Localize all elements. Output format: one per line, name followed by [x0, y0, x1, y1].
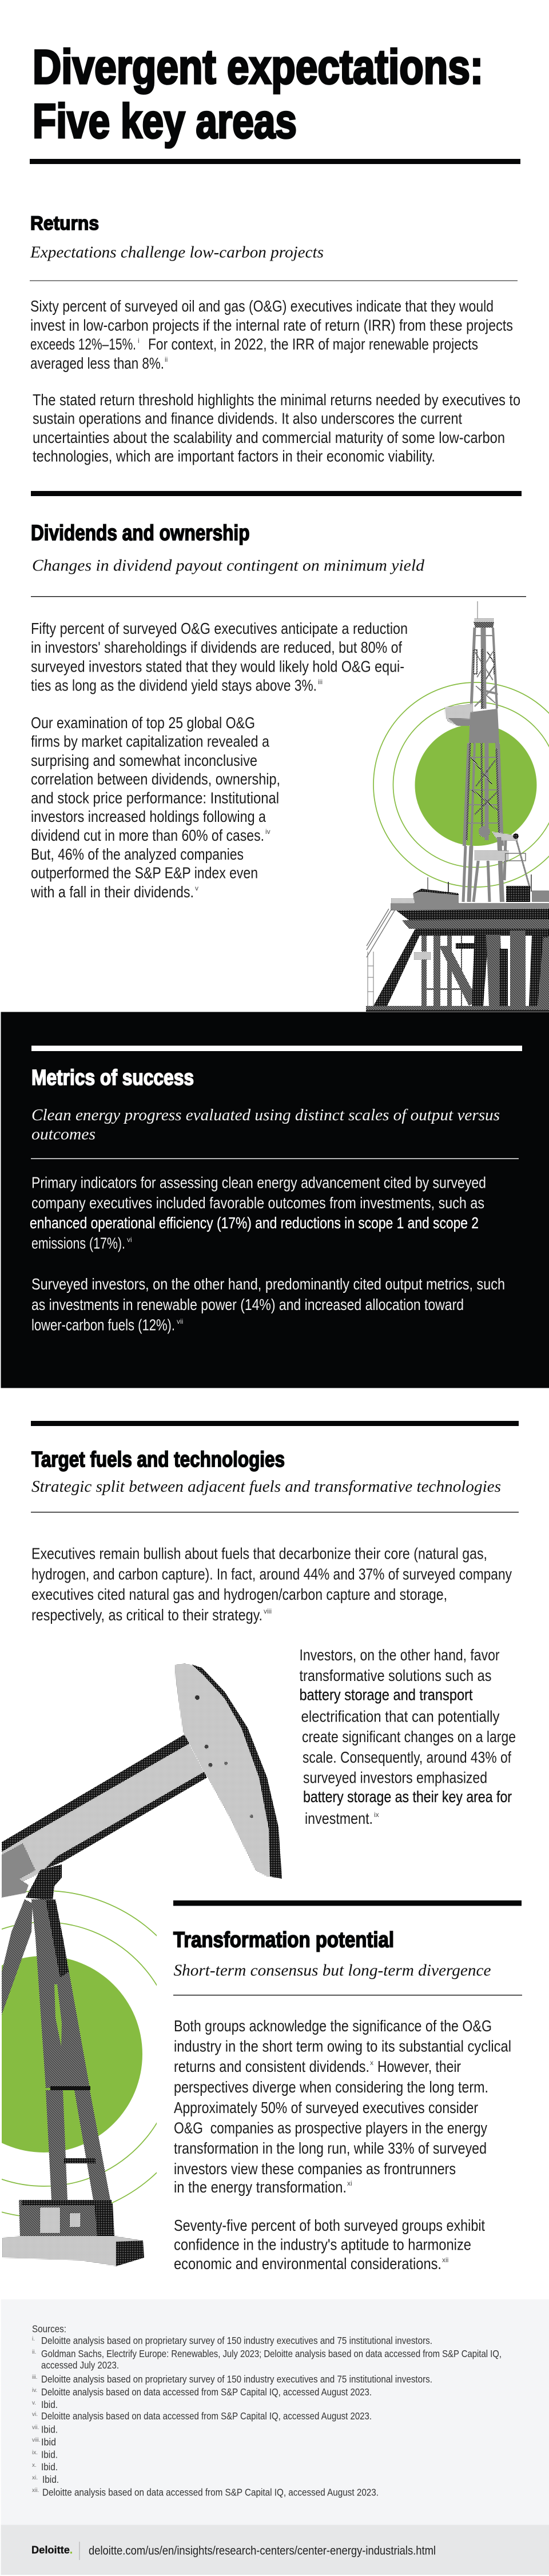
text: dividends paragraph 2: correlation between dividends, ownership, — [31, 770, 280, 788]
sources list: viii. — [32, 2437, 40, 2443]
panel: sources — [1, 2299, 549, 2525]
sources list: vii. — [32, 2425, 39, 2431]
subheading: target fuels: Strategic split between adjacent fuels and transformative technologies — [31, 1477, 501, 1496]
sources list: Ibid. — [41, 2461, 58, 2473]
heading: returns: Returns — [30, 213, 99, 234]
text: dividends paragraph 2: and stock price performance: Institutional — [31, 789, 279, 807]
subheading: metrics: outcomes — [31, 1125, 96, 1143]
sources list: Ibid. — [41, 2399, 58, 2410]
text: investors column: battery storage and transport — [300, 1686, 473, 1703]
text: transformation paragraph 2: xii — [442, 2256, 448, 2264]
green circle — [415, 724, 536, 846]
text: transformation paragraph 1: investors view these companies as frontrunners — [174, 2160, 456, 2178]
travelling block and crossbeam — [479, 826, 490, 837]
text: dividends paragraph 2: dividend cut in more than 60% of cases. — [31, 826, 264, 844]
stairs and scaffold — [367, 909, 395, 1006]
section: target fuels and technologies — [31, 1448, 519, 1827]
sources list: xii. — [32, 2487, 39, 2494]
text: target fuels paragraph — [31, 1544, 512, 1624]
sources list: Deloitte analysis based on proprietary survey of 150 industry executives and 75 institutional investors. — [41, 2373, 432, 2385]
sources list: Ibid — [41, 2436, 56, 2447]
subheading: transformation potential: Short-term consensus but long-term divergence — [174, 1962, 491, 1980]
title — [33, 40, 483, 148]
text: transformation paragraph 1: xi — [347, 2179, 352, 2187]
text: dividends paragraph 1: ties as long as the dividend yield stays above 3%. — [31, 677, 317, 694]
lower mast — [464, 743, 502, 846]
text: transformation paragraph 2 — [174, 2216, 485, 2273]
subheading: metrics: Clean energy progress evaluated using distinct scales of output versus — [31, 1106, 500, 1124]
text: metrics paragraph 2: as investments in renewable power (14%) and increased allocation toward — [31, 1296, 464, 1313]
section: dividends and ownership — [30, 521, 526, 901]
text: metrics paragraph 1 — [30, 1174, 486, 1252]
green rings and circle — [2, 1891, 157, 2216]
text: dividends paragraph 1: Fifty percent of surveyed O&G executives anticipate a reduction — [31, 620, 408, 637]
sources list: Deloitte analysis based on data accessed from S&P Capital IQ, accessed August 2023. — [42, 2486, 379, 2498]
text: investors column: ix — [374, 1811, 379, 1819]
side platform — [445, 704, 473, 726]
text: dividends paragraph 2: outperformed the S&P E&P index even — [31, 864, 258, 881]
text: investors column: battery storage as their key area for — [303, 1788, 512, 1806]
sources list: i. — [32, 2336, 35, 2342]
text: dividends paragraph 1: surveyed investors stated that they would likely hold O&G equi- — [31, 657, 404, 676]
sources list — [32, 2335, 502, 2498]
deck and truss — [391, 903, 549, 930]
illustration: oil rig with green circle — [366, 601, 549, 1012]
sources list: Ibid. — [42, 2474, 59, 2485]
subheading: metrics — [31, 1106, 500, 1143]
text: transformation paragraph 1: returns and consistent dividends. — [174, 2058, 369, 2075]
footer url: deloitte.com/us/en/insights/research-centers/center-energy-industrials.html — [89, 2545, 436, 2557]
text: dividends paragraph 1: iii — [318, 678, 323, 686]
heading: target fuels: Target fuels and technologies — [31, 1448, 285, 1472]
deck hut and equipment — [391, 874, 549, 905]
sources list: Deloitte analysis based on data accessed from S&P Capital IQ, accessed August 2023. — [41, 2410, 372, 2422]
text: dividends paragraph 2: v — [195, 884, 198, 892]
text: target fuels paragraph: viii — [264, 1607, 272, 1615]
text: returns paragraph 1 — [30, 297, 513, 372]
text: dividends paragraph 2 — [30, 714, 280, 901]
sources list: x. — [32, 2462, 37, 2469]
sources list: vi. — [32, 2411, 38, 2418]
sources list: iv. — [32, 2387, 37, 2394]
text: returns paragraph 2: technologies, which are important factors in their economic viability. — [33, 447, 435, 465]
green concentric rings — [373, 682, 549, 887]
pumpjack horse head — [174, 1663, 282, 1879]
subheading: dividends: Changes in dividend payout contingent on minimum yield — [32, 557, 425, 575]
text: dividends paragraph 2: surprising and somewhat inconclusive — [31, 752, 257, 769]
sources list: accessed July 2023. — [41, 2359, 119, 2371]
text: returns paragraph 1: averaged less than 8%. — [30, 354, 164, 372]
derrick tower — [445, 601, 530, 902]
text: returns paragraph 2: sustain operations and finance dividends. It also underscores the current — [33, 409, 462, 428]
text: investors column — [300, 1646, 516, 1827]
text: metrics paragraph 2: lower-carbon fuels (12%). — [31, 1316, 175, 1334]
text: returns paragraph 1: For context, in 2022, the IRR of major renewable projects — [148, 335, 478, 353]
text: dividends paragraph 2: investors increased holdings following a — [31, 808, 266, 825]
heading: metrics of success: Metrics of success — [31, 1066, 194, 1090]
section: returns — [30, 213, 520, 465]
sources list: Deloitte analysis based on proprietary survey of 150 industry executives and 75 institutional investors. — [41, 2335, 432, 2346]
pumpjack walking beam — [2, 1735, 207, 1898]
text: transformation paragraph 1: in the energy transformation. — [174, 2178, 347, 2196]
text: investors column: Investors, on the other hand, favor — [300, 1646, 500, 1664]
lower derrick legs — [463, 837, 530, 902]
text: metrics paragraph 2: vii — [177, 1317, 183, 1325]
footer — [1, 2525, 549, 2575]
text: investors column: surveyed investors emphasized — [303, 1768, 487, 1787]
text: transformation paragraph 1 — [174, 2017, 511, 2196]
text: investors column: electrification that can potentially — [301, 1708, 500, 1725]
sources list: Ibid. — [41, 2423, 58, 2435]
sources list: ix. — [32, 2450, 38, 2456]
text: transformation paragraph 1: Both groups acknowledge the significance of the O&G — [174, 2017, 492, 2035]
heading: dividends: Dividends and ownership — [31, 521, 249, 545]
text: metrics paragraph 1: emissions (17%). — [31, 1235, 125, 1252]
substructure legs and braces — [366, 929, 549, 1012]
section: transformation potential — [173, 1928, 522, 2273]
sources list: xi. — [32, 2475, 38, 2481]
text: dividends paragraph 2: with a fall in their dividends. — [30, 883, 194, 901]
text: returns paragraph 1: ii — [165, 356, 168, 364]
text: transformation paragraph 2: confidence in the industry's aptitude to harmonize — [174, 2236, 471, 2253]
text: returns paragraph 2 — [33, 391, 520, 465]
sources list: v. — [32, 2400, 36, 2406]
text: transformation paragraph 2: economic and environmental considerations. — [174, 2255, 441, 2273]
text: dividends paragraph 1: in investors' shareholdings if dividends are reduced, but 80% of — [31, 638, 402, 656]
text: transformation paragraph 1: Approximately 50% of surveyed executives consider — [174, 2099, 478, 2116]
text: transformation paragraph 1: x — [370, 2059, 373, 2067]
text: transformation paragraph 1: perspectives diverge when considering the long term. — [174, 2078, 488, 2096]
subheading: returns: Expectations challenge low-carbon projects — [30, 243, 324, 262]
sources list: Ibid. — [41, 2449, 58, 2460]
heading: transformation potential: Transformation potential — [173, 1928, 394, 1952]
panel: metrics of success — [1, 1012, 549, 1388]
text: transformation paragraph 1: However, their — [377, 2058, 461, 2075]
sources label: Sources: — [32, 2323, 66, 2334]
text: metrics paragraph 1: vi — [127, 1236, 132, 1244]
text: returns paragraph 1: exceeds 12%–15%. — [30, 335, 136, 353]
text: transformation paragraph 1: O&G companies as prospective players in the energy — [174, 2119, 487, 2136]
Deloitte logo: Deloitte. — [31, 2545, 73, 2556]
text: target fuels paragraph: executives cited natural gas and hydrogen/carbon capture and storage, — [31, 1585, 447, 1603]
text: dividends paragraph 2: But, 46% of the analyzed companies — [31, 845, 244, 863]
text: dividends paragraph 2: firms by market capitalization revealed a — [31, 733, 269, 750]
text: dividends paragraph 2: iv — [265, 828, 270, 836]
illustration: pumpjack with green circle — [0, 1663, 282, 2266]
sources list: ii. — [32, 2349, 36, 2355]
text: transformation paragraph 1: transformation in the long run, while 33% of surveyed — [174, 2139, 487, 2157]
text: dividends paragraph 2: Our examination of top 25 global O&G — [31, 714, 255, 732]
text: transformation paragraph 2: Seventy-five percent of both surveyed groups exhibit — [174, 2216, 485, 2234]
text: dividends paragraph 1 — [31, 620, 408, 694]
sources list: iii. — [32, 2374, 37, 2381]
text: metrics paragraph 2 — [31, 1275, 505, 1334]
text: returns paragraph 1: i — [138, 337, 140, 345]
text: target fuels paragraph: respectively, as critical to their strategy. — [31, 1606, 262, 1624]
text: investors column: investment. — [305, 1810, 373, 1827]
title: Five key areas — [33, 94, 297, 148]
sources list: Deloitte analysis based on data accessed from S&P Capital IQ, accessed August 2023. — [41, 2386, 372, 2398]
pumpjack samson post — [2, 1864, 144, 2266]
text: investors column: transformative solutions such as — [300, 1667, 492, 1684]
